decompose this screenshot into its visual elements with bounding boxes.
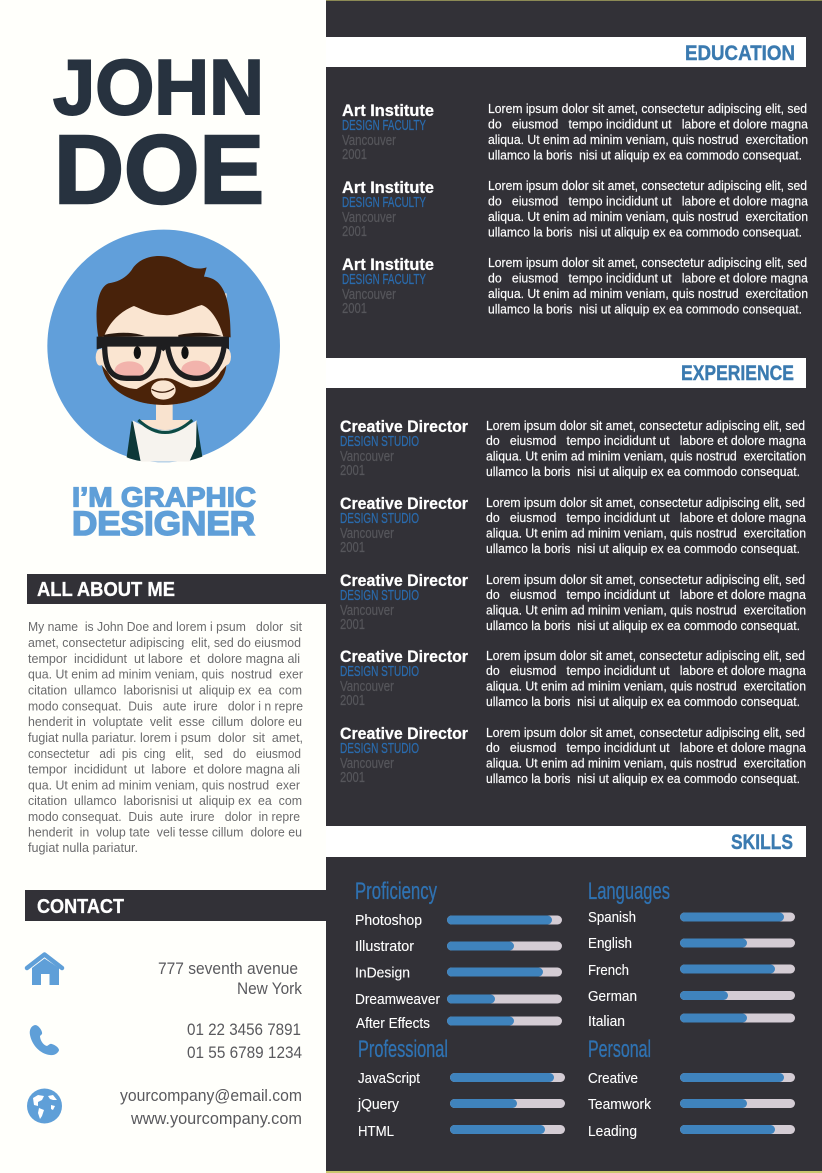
experience entry 3: ullamco la boris nisi ut aliquip ex ea commodo consequat.	[486, 619, 800, 633]
experience entry 1: do eiusmod tempo incididunt ut labore et dolore magna	[486, 434, 806, 448]
skills group: professional: HTML	[358, 1124, 394, 1140]
text block: about me: qua. Ut enim ad minim veniam, quis nostrud exer	[28, 778, 300, 792]
education entry 1: 2001	[342, 146, 367, 163]
experience entry 2: ullamco la boris nisi ut aliquip ex ea commodo consequat.	[486, 542, 800, 556]
education entry 2: do eiusmod tempo incididunt ut labore et dolore magna	[488, 194, 808, 208]
text block: about me	[28, 620, 303, 855]
text block: about me: henderit in volup tate veli tesse cillum dolore eu	[28, 826, 302, 840]
education entry 3: Vancouver	[342, 286, 396, 303]
education entry 1: Art Institute	[342, 102, 434, 120]
education entry 3	[342, 256, 808, 317]
heading: all about me: ALL ABOUT ME	[37, 579, 175, 601]
experience entry 4: Lorem ipsum dolor sit amet, consectetur adipiscing elit, sed	[486, 649, 805, 663]
experience entry 1: Vancouver	[340, 448, 394, 465]
experience entry 1: aliqua. Ut enim ad minim veniam, quis nostrud exercitation	[486, 450, 806, 464]
heading: contact: CONTACT	[37, 896, 124, 918]
experience entry 5: aliqua. Ut enim ad minim veniam, quis nostrud exercitation	[486, 756, 806, 770]
skills group: personal: Personal	[588, 1036, 651, 1063]
experience entry 3: Lorem ipsum dolor sit amet, consectetur adipiscing elit, sed	[486, 573, 805, 587]
contact phones: 01 55 6789 1234	[187, 1044, 302, 1062]
education entry 2: DESIGN FACULTY	[342, 194, 426, 211]
experience entry 2: do eiusmod tempo incididunt ut labore et dolore magna	[486, 511, 806, 525]
experience entry 5: ullamco la boris nisi ut aliquip ex ea commodo consequat.	[486, 772, 800, 786]
skills group: personal: Leading	[588, 1124, 637, 1140]
avatar head	[96, 256, 231, 405]
skills group: personal	[588, 1036, 795, 1140]
icon: globe	[27, 1088, 62, 1124]
contact address: New York	[237, 980, 303, 998]
experience entry 5: do eiusmod tempo incididunt ut labore et dolore magna	[486, 741, 806, 755]
heading: education	[326, 37, 806, 67]
experience entry 4: do eiusmod tempo incididunt ut labore et dolore magna	[486, 664, 806, 678]
experience entry 4: 2001	[340, 692, 365, 709]
contact phones: 01 22 3456 7891	[187, 1021, 301, 1039]
experience entry 5: Vancouver	[340, 755, 394, 772]
education entry 1	[342, 102, 808, 163]
experience entry 3: Creative Director	[340, 572, 469, 590]
skills group: languages: English	[588, 936, 632, 952]
text block: about me: henderit in voluptate velit esse cillum dolore eu	[28, 715, 302, 729]
title: John Doe	[53, 43, 264, 224]
skills group: professional: Professional	[358, 1036, 448, 1063]
skills group: languages	[588, 878, 795, 1030]
text block: about me: qua. Ut enim ad minim veniam, quis nostrud exer	[28, 668, 303, 682]
skills group: personal: Creative	[588, 1071, 638, 1087]
icon: phone	[30, 1025, 59, 1055]
heading: contact	[25, 890, 326, 921]
education entry 2: aliqua. Ut enim ad minim veniam, quis nostrud exercitation	[488, 210, 808, 224]
education entry 2	[342, 179, 808, 240]
education entry 1: DESIGN FACULTY	[342, 117, 426, 134]
text block: about me: citation ullamco laborisnisi ut aliquip ex ea com	[28, 684, 302, 698]
text block: about me: modo consequat. Duis aute irure dolor in repre	[28, 810, 300, 824]
experience entry 2: Creative Director	[340, 495, 469, 513]
heading: all about me	[27, 574, 326, 604]
education entry 3: ullamco la boris nisi ut aliquip ex ea commodo consequat.	[488, 302, 802, 316]
panel: right dark column	[326, 0, 822, 1173]
experience entry 3: Vancouver	[340, 602, 394, 619]
skills group: languages: French	[588, 963, 629, 979]
experience entry 1	[340, 418, 806, 479]
education entry 1: ullamco la boris nisi ut aliquip ex ea commodo consequat.	[488, 148, 802, 162]
skills group: languages: Italian	[588, 1014, 625, 1030]
experience entry 3: 2001	[340, 616, 365, 633]
experience entry 3: DESIGN STUDIO	[340, 587, 419, 604]
experience entry 2: DESIGN STUDIO	[340, 510, 419, 527]
skills group: professional: jQuery	[357, 1097, 400, 1113]
contact web: www.yourcompany.com	[130, 1110, 302, 1128]
experience entry 3	[340, 572, 806, 633]
skills group: proficiency: Illustrator	[355, 939, 414, 955]
education entry 3: Lorem ipsum dolor sit amet, consectetur adipiscing elit, sed	[488, 256, 807, 270]
skills group: languages: Spanish	[588, 910, 636, 926]
experience entry 2: aliqua. Ut enim ad minim veniam, quis nostrud exercitation	[486, 526, 806, 540]
skills group: professional: JavaScript	[358, 1071, 420, 1087]
text block: about me: fugiat nulla pariatur. lorem i psum dolor sit amet,	[28, 731, 303, 745]
heading: skills: SKILLS	[731, 831, 793, 854]
text block: about me: tempor incididunt ut labore et dolore magna ali	[28, 652, 300, 666]
experience entry 2: Lorem ipsum dolor sit amet, consectetur adipiscing elit, sed	[486, 496, 805, 510]
heading: education: EDUCATION	[685, 42, 795, 65]
experience entry 4: ullamco la boris nisi ut aliquip ex ea commodo consequat.	[486, 695, 800, 709]
experience entry 4	[340, 648, 806, 709]
education entry 3: do eiusmod tempo incididunt ut labore et dolore magna	[488, 272, 808, 286]
education entry 1: aliqua. Ut enim ad minim veniam, quis nostrud exercitation	[488, 133, 808, 147]
tagline: I'm graphic designer: I’M GRAPHIC	[72, 482, 256, 512]
education entry 3: aliqua. Ut enim ad minim veniam, quis nostrud exercitation	[488, 287, 808, 301]
experience entry 1: Lorem ipsum dolor sit amet, consectetur adipiscing elit, sed	[486, 419, 805, 433]
text block: about me: amet, consectetur adipiscing elit, sed do eiusmod	[28, 636, 301, 650]
skills group: languages: Languages	[588, 878, 670, 905]
education entry 3: Art Institute	[342, 256, 434, 274]
experience entry 1: ullamco la boris nisi ut aliquip ex ea commodo consequat.	[486, 465, 800, 479]
contact web: yourcompany@email.com	[120, 1087, 302, 1105]
skills group: proficiency: InDesign	[355, 966, 410, 982]
experience entry 4: Vancouver	[340, 678, 394, 695]
experience entry 5: 2001	[340, 769, 365, 786]
heading: experience	[326, 358, 806, 388]
skills group: proficiency: Dreamweaver	[355, 992, 440, 1008]
skills group: proficiency: Photoshop	[355, 913, 422, 929]
skills group: personal: Teamwork	[588, 1097, 652, 1113]
skills group: proficiency: After Effects	[356, 1016, 430, 1032]
contact address: 777 seventh avenue	[158, 960, 298, 978]
text block: about me: My name is John Doe and lorem i psum dolor sit	[28, 620, 303, 634]
avatar shirt	[127, 398, 202, 462]
experience entry 4: aliqua. Ut enim ad minim veniam, quis nostrud exercitation	[486, 680, 806, 694]
experience entry 4: Creative Director	[340, 648, 469, 666]
contact address	[158, 960, 303, 998]
avatar background circle	[47, 230, 280, 462]
experience entry 2: Vancouver	[340, 525, 394, 542]
experience entry 5: DESIGN STUDIO	[340, 740, 419, 757]
icon: home	[27, 954, 62, 985]
tagline: I'm graphic designer: DESIGNER	[72, 505, 255, 543]
experience entry 1: 2001	[340, 462, 365, 479]
education entry 2: Art Institute	[342, 179, 434, 197]
text block: about me: tempor incididunt ut labore et dolore magna ali	[28, 762, 300, 776]
experience entry 3: do eiusmod tempo incididunt ut labore et dolore magna	[486, 588, 806, 602]
education entry 3: DESIGN FACULTY	[342, 271, 426, 288]
experience entry 2	[340, 495, 806, 556]
experience entry 4: DESIGN STUDIO	[340, 663, 419, 680]
heading: experience: EXPERIENCE	[681, 362, 794, 385]
experience entry 2: 2001	[340, 539, 365, 556]
experience entry 1: DESIGN STUDIO	[340, 433, 419, 450]
contact web	[120, 1087, 302, 1128]
experience entry 5: Creative Director	[340, 725, 469, 743]
text block: about me: modo consequat. Duis aute irure dolor i n repre	[28, 700, 303, 714]
education entry 3: 2001	[342, 300, 367, 317]
experience entry 5	[340, 725, 806, 786]
experience entry 1: Creative Director	[340, 418, 469, 436]
skills group: proficiency: Proficiency	[355, 878, 437, 905]
education entry 2: ullamco la boris nisi ut aliquip ex ea commodo consequat.	[488, 226, 802, 240]
education entry 2: Vancouver	[342, 209, 396, 226]
text block: about me: consectetur adi pis cing elit, sed do eiusmod	[28, 747, 301, 761]
education entry 1: Vancouver	[342, 132, 396, 149]
education entry 1: Lorem ipsum dolor sit amet, consectetur adipiscing elit, sed	[488, 102, 807, 116]
text block: about me: fugiat nulla pariatur.	[28, 841, 138, 855]
heading: skills	[326, 826, 806, 857]
education entry 2: Lorem ipsum dolor sit amet, consectetur adipiscing elit, sed	[488, 179, 807, 193]
title: John Doe: JOHN	[53, 43, 264, 131]
portrait avatar	[47, 230, 280, 462]
skills group: proficiency	[355, 878, 562, 1032]
contact phones	[187, 1021, 302, 1062]
skills group: professional	[357, 1036, 565, 1140]
text block: about me: citation ullamco laborisnisi ut aliquip ex ea com	[28, 794, 302, 808]
title: John Doe: DOE	[54, 115, 264, 224]
skills group: languages: German	[588, 989, 637, 1005]
experience entry 3: aliqua. Ut enim ad minim veniam, quis nostrud exercitation	[486, 604, 806, 618]
tagline: I'm graphic designer	[72, 482, 256, 543]
experience entry 5: Lorem ipsum dolor sit amet, consectetur adipiscing elit, sed	[486, 726, 805, 740]
education entry 1: do eiusmod tempo incididunt ut labore et dolore magna	[488, 118, 808, 132]
education entry 2: 2001	[342, 223, 367, 240]
